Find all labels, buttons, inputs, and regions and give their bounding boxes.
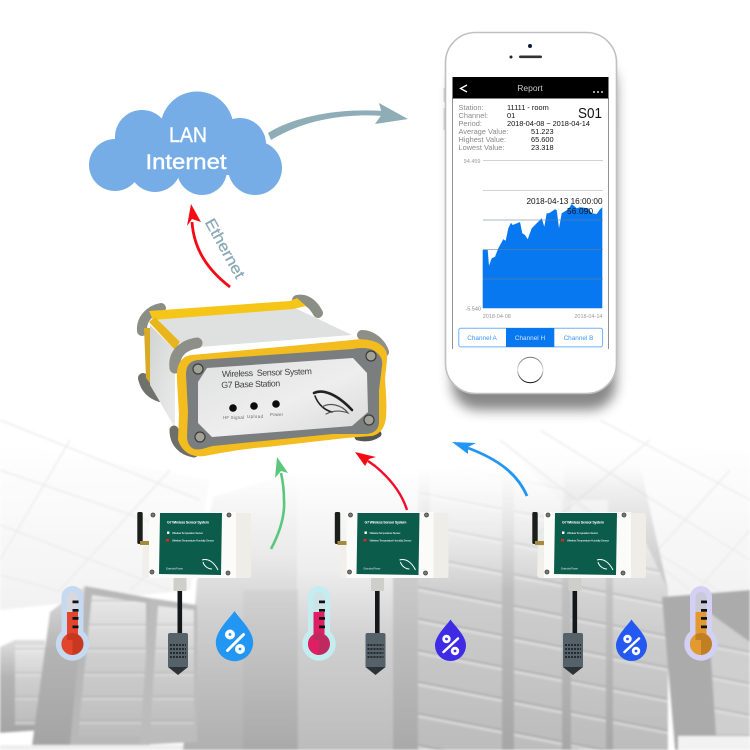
report details: S01 [578, 105, 602, 122]
report details: Lowest Value: [458, 143, 504, 152]
area chart: 2018-04-13 16:00:00 [526, 197, 603, 206]
label: Ethernet: Ethernet [201, 216, 248, 282]
front grey bezel [186, 348, 382, 450]
status LEDs: Power [270, 412, 284, 417]
humidity probe [366, 633, 386, 675]
sensor panel: G7 Wireless Sensor System [167, 520, 209, 524]
sensor panel: G7 Wireless Sensor System [562, 520, 604, 524]
arrow: sensor 2 to base [355, 452, 407, 510]
area chart: 2018-04-08 [483, 314, 511, 320]
humidity probe [168, 633, 188, 675]
logo [314, 392, 352, 414]
arrow: base station to cloud [187, 204, 230, 287]
channel tabs: Channel A [467, 335, 497, 342]
status LEDs [223, 400, 284, 420]
channel tabs: Channel B [564, 335, 593, 342]
area chart: 56.090 [567, 207, 593, 216]
cloud [89, 92, 282, 195]
left racks [0, 586, 197, 750]
report details: Channel: [458, 111, 488, 120]
background: server room [0, 420, 750, 750]
arrow: sensor 3 to base [452, 442, 527, 496]
sensor panel [356, 513, 420, 575]
report details: 01 [507, 111, 515, 120]
report details: Period: [458, 119, 482, 128]
area chart: 94.459 [464, 159, 480, 165]
sensor unit 2 [335, 512, 448, 675]
channel tabs [459, 328, 603, 347]
sensor panel [554, 513, 617, 575]
icon: thermometer orange [684, 586, 718, 661]
report details: 51.223 [531, 127, 554, 136]
sensor panel: Wireless Temperature Sensor [567, 531, 598, 535]
sensor panel: Wireless Temperature Humidity Sensor [567, 539, 609, 543]
area chart: -5.540 [465, 306, 481, 312]
channel tabs: Channel H [515, 335, 545, 342]
arrow: sensor 1 to base [271, 457, 288, 549]
sensor panel: Wireless Temperature Sensor [172, 531, 203, 535]
screen header: Report [517, 83, 543, 93]
sensor panel: Extended Power [561, 566, 578, 570]
front panel [198, 358, 368, 437]
status LEDs: HF Signal [223, 415, 244, 420]
report details: 65.600 [531, 135, 554, 144]
sensor panel: Wireless Temperature Humidity Sensor [370, 539, 412, 543]
cloud label: Internet [146, 151, 227, 174]
humidity probe [563, 633, 583, 675]
screen header [452, 77, 608, 98]
screws [193, 351, 376, 442]
panel label: Wireless Sensor System [222, 366, 312, 379]
status LEDs: Upload [247, 414, 264, 419]
area chart: 2018-04-14 [574, 314, 602, 320]
cloud label: LAN [169, 124, 207, 147]
sensor unit 3 [532, 512, 646, 675]
report details [458, 103, 602, 152]
report details: 23.318 [531, 143, 554, 152]
sensor unit 1 [137, 512, 251, 675]
right racks [418, 465, 668, 750]
icon: humidity drop violet [435, 620, 466, 661]
phone [444, 32, 618, 410]
icon: thermometer pink [302, 586, 336, 661]
sensor panel [159, 513, 222, 575]
icon: thermometer red [56, 586, 89, 661]
sensor panel: G7 Wireless Sensor System [364, 520, 406, 524]
icon: humidity drop blue [616, 620, 647, 661]
report details: Station: [458, 103, 484, 112]
report details: Average Value: [458, 127, 508, 136]
arrow: cloud to phone [268, 103, 408, 140]
area chart [464, 159, 603, 320]
dark room right [662, 590, 750, 750]
enclosure body [142, 298, 384, 453]
sensor panel: Wireless Temperature Humidity Sensor [172, 539, 214, 543]
phone screen [452, 77, 608, 349]
sensor panel: Extended Power [166, 566, 183, 570]
report details: 2018-04-08 ~ 2018-04-14 [507, 119, 590, 128]
report details: Highest Value: [458, 135, 506, 144]
panel label: G7 Base Station [221, 378, 280, 390]
icon: humidity drop light blue [216, 611, 253, 661]
sensor panel: Wireless Temperature Sensor [370, 531, 401, 535]
base station [142, 298, 387, 456]
home button [518, 357, 543, 383]
report details: 11111 - room [507, 103, 549, 112]
front yellow frame [177, 339, 387, 456]
panel label [221, 366, 312, 390]
sensor panel: Extended Power [364, 566, 381, 570]
